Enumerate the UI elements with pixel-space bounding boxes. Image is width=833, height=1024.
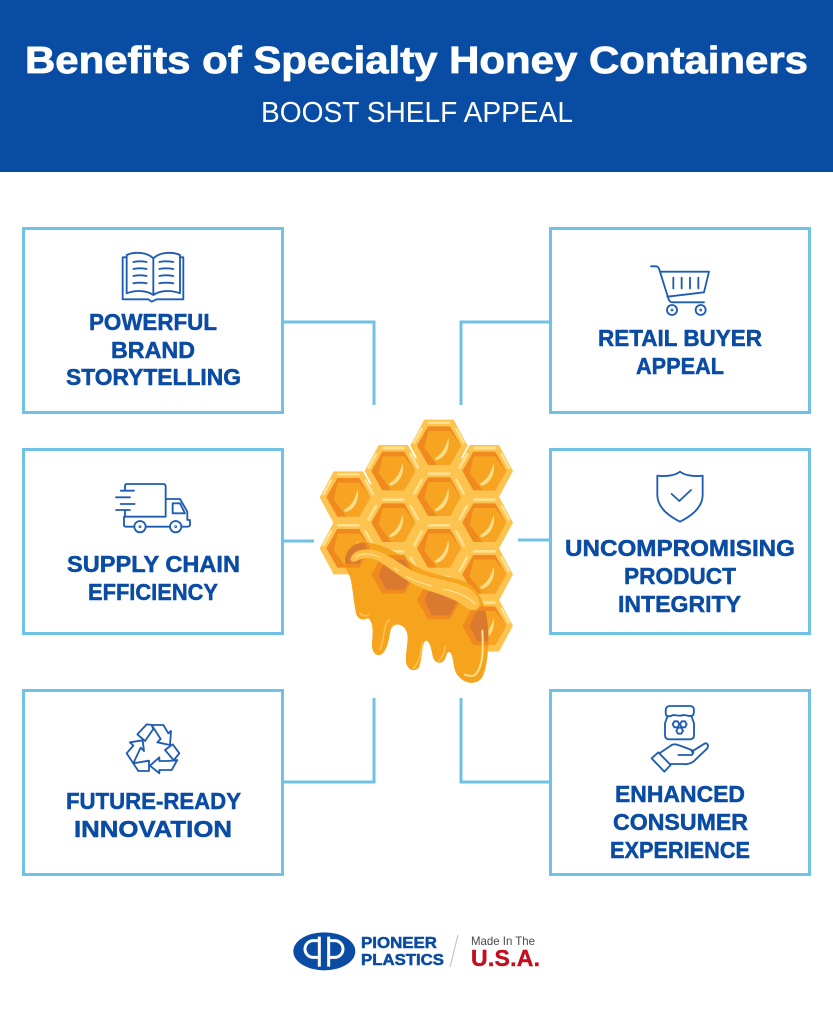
panel: retail buyer appeal (550, 228, 810, 412)
icon: shield with check (657, 472, 703, 522)
label: RETAIL BUYER (598, 325, 762, 351)
label: ENHANCED (615, 781, 745, 807)
label: APPEAL (636, 353, 724, 379)
label: CONSUMER (613, 809, 748, 835)
label: EXPERIENCE (610, 837, 750, 863)
label (66, 309, 241, 390)
icon: open book (123, 253, 183, 302)
panel: uncompromising product integrity (550, 450, 810, 634)
panel: supply chain efficiency (24, 450, 282, 634)
brand name (361, 935, 444, 969)
made in the usa: Made In The (471, 934, 535, 948)
label (565, 535, 795, 617)
icon: pioneer plastics oval mark (293, 932, 355, 970)
icon: shopping cart (651, 266, 709, 315)
label (67, 551, 240, 605)
connector lines (283, 322, 550, 782)
label: UNCOMPROMISING (565, 535, 795, 561)
central honeycomb illustration (320, 420, 513, 683)
icon: delivery truck (116, 484, 190, 532)
label: INTEGRITY (618, 591, 741, 617)
label: SUPPLY CHAIN (67, 551, 240, 577)
panel: powerful brand storytelling (24, 228, 282, 412)
brand name: PLASTICS (361, 952, 444, 969)
label (610, 781, 750, 863)
header banner (0, 0, 833, 172)
label: BRAND (111, 337, 195, 363)
label: FUTURE-READY (66, 788, 241, 814)
label: POWERFUL (89, 309, 217, 335)
footer logo (293, 932, 540, 971)
panel: enhanced consumer experience (550, 690, 810, 874)
brand name: PIONEER (361, 935, 437, 952)
honey drip (344, 542, 488, 683)
label (598, 325, 762, 379)
label: STORYTELLING (66, 364, 241, 390)
label: EFFICIENCY (88, 579, 218, 605)
subtitle: BOOST SHELF APPEAL (261, 97, 573, 129)
icon: recycle arrows (127, 724, 179, 773)
panel: future-ready innovation (24, 690, 282, 874)
title: Benefits of Specialty Honey Containers (25, 40, 808, 82)
made in the usa: U.S.A. (471, 945, 540, 971)
label: PRODUCT (624, 563, 736, 589)
label (66, 788, 241, 842)
icon: honey jar over hand (652, 706, 708, 772)
label: INNOVATION (74, 816, 232, 842)
